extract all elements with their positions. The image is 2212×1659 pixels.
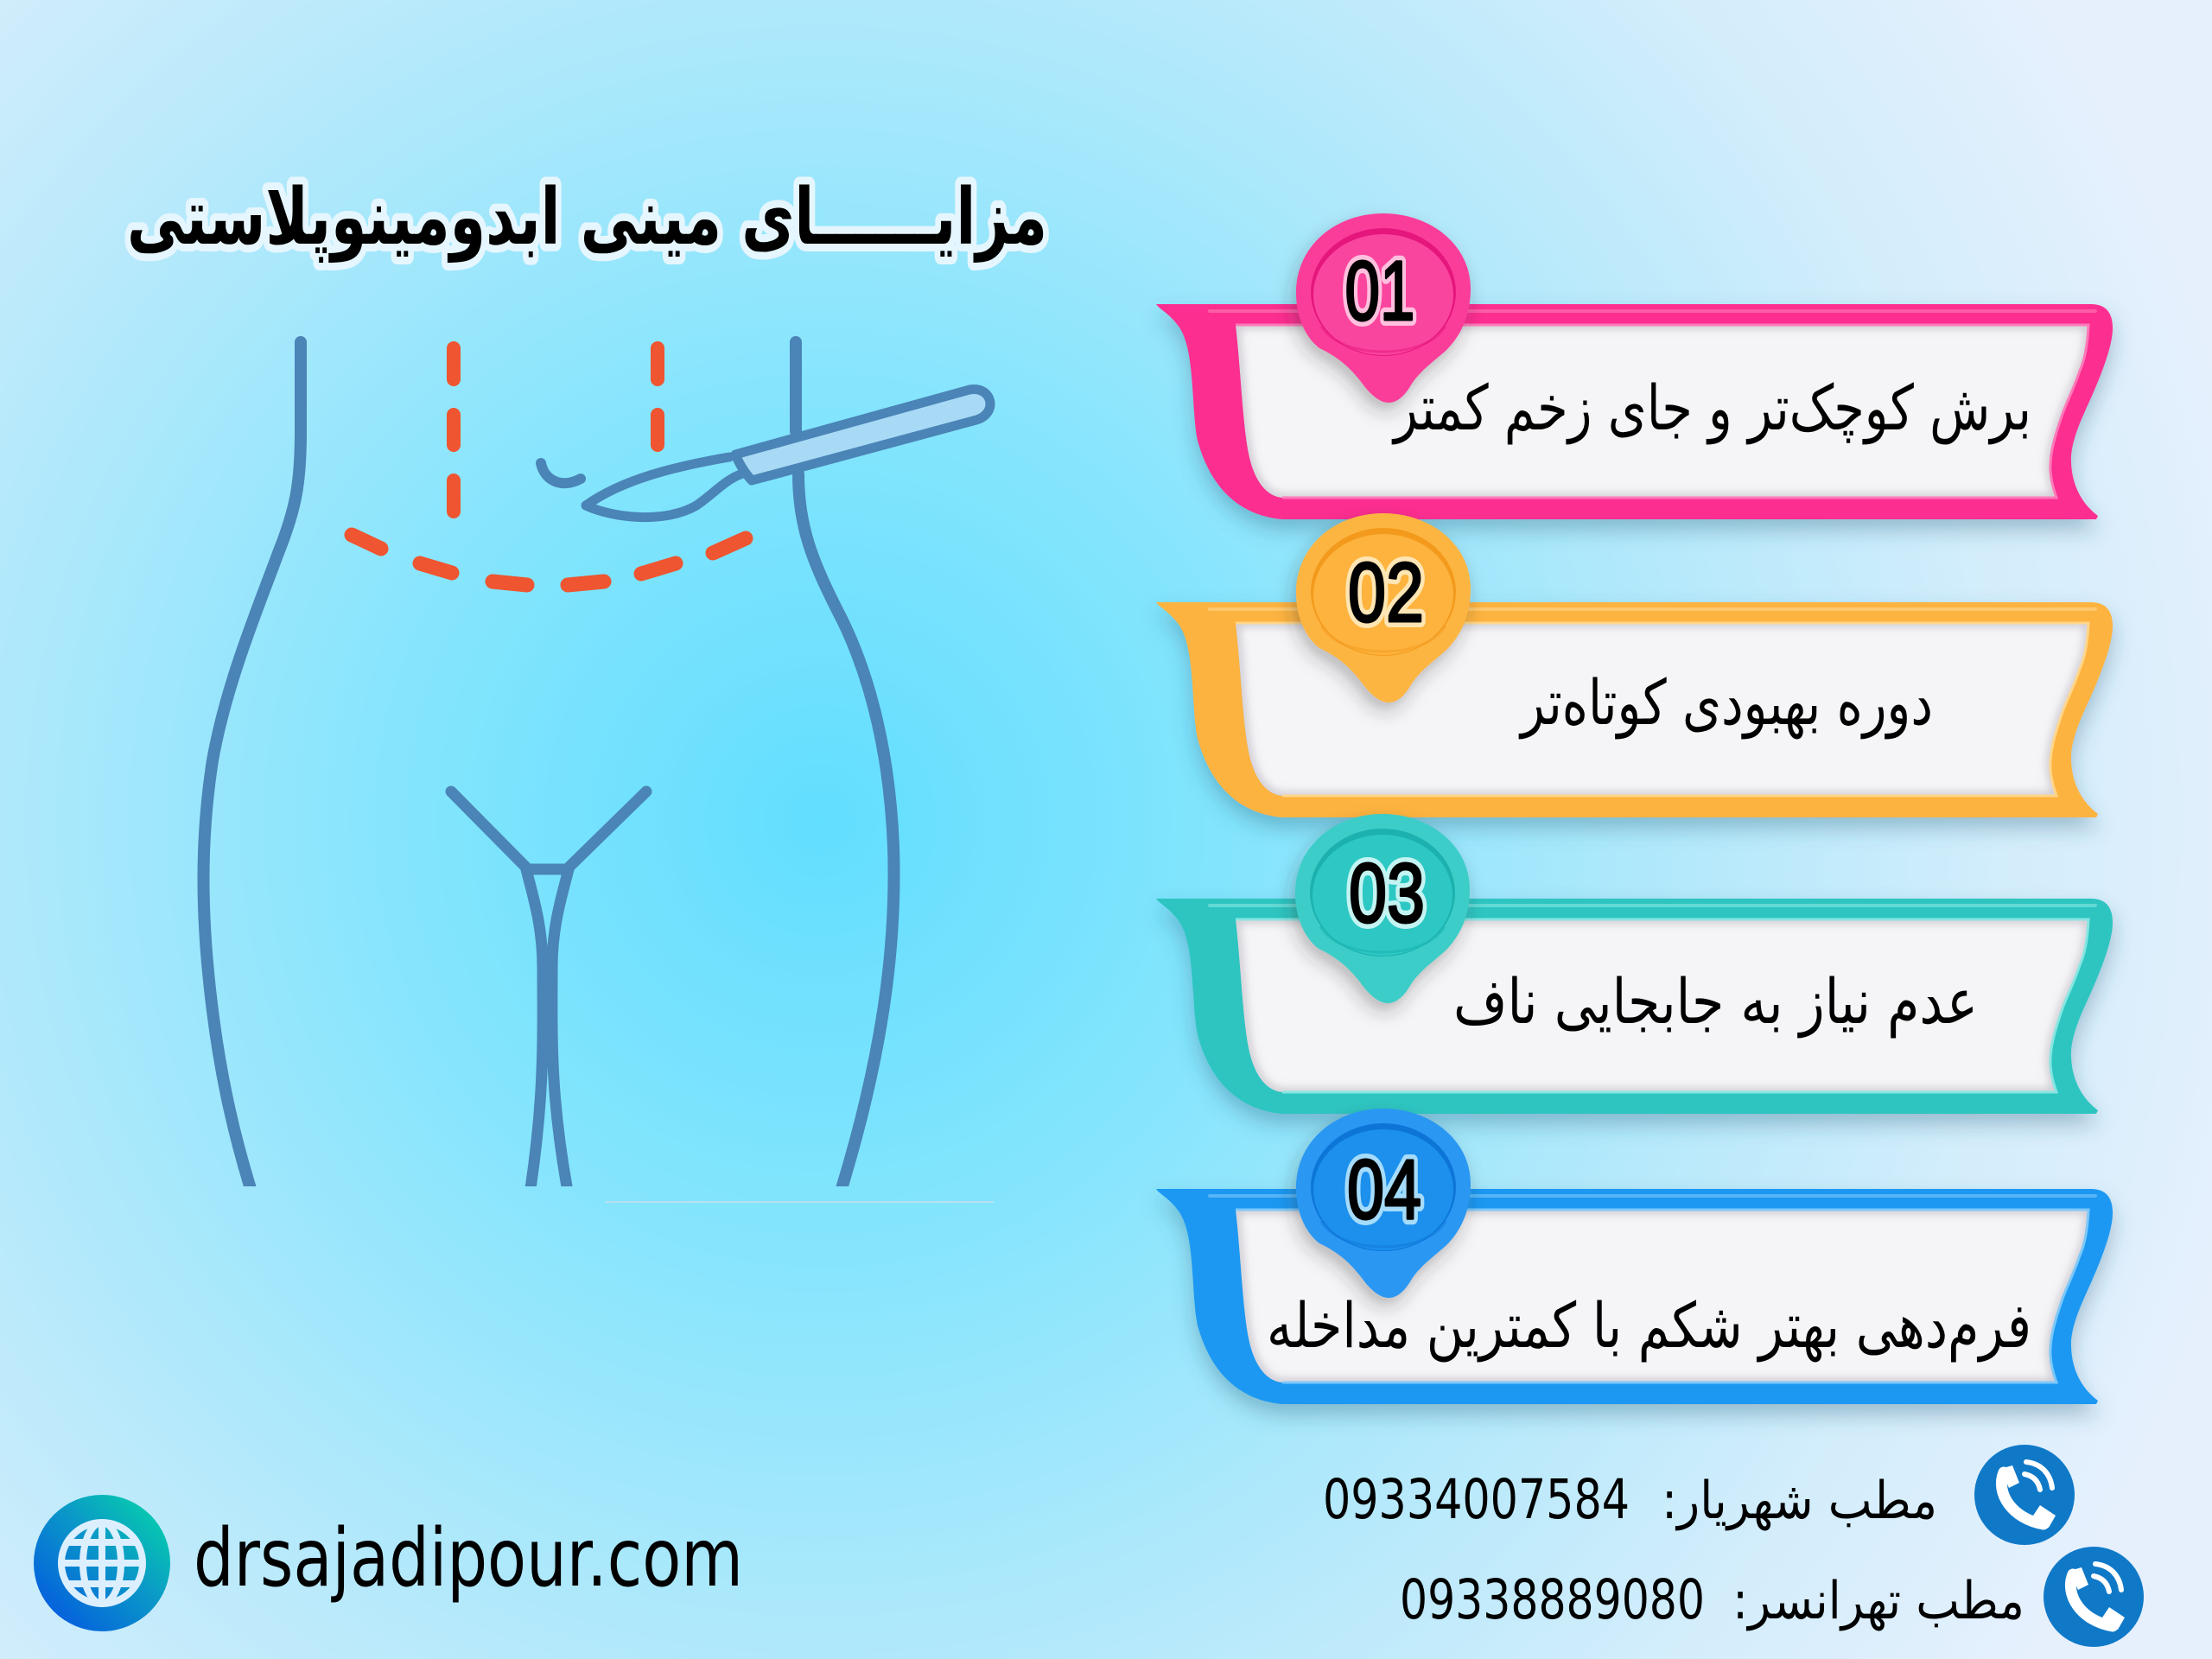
clinic contact 2: مطب تهرانسر:	[1732, 1571, 2024, 1631]
number 01: 01	[1344, 244, 1415, 338]
card 4	[1156, 1109, 2113, 1404]
curved incision dashes	[352, 535, 746, 585]
benefit text 2: دوره بهبودی کوتاه‌تر	[1519, 666, 1933, 740]
right body contour upper	[790, 342, 802, 431]
card 4 frame	[1156, 1189, 2113, 1404]
illustration: abdomen with incision lines and scalpel	[204, 342, 990, 1205]
phone icon 1	[1974, 1445, 2075, 1545]
card 3 frame	[1156, 899, 2113, 1114]
card 2 frame	[1156, 602, 2113, 817]
pin 02	[1296, 513, 1471, 702]
benefit text 1: برش کوچک‌تر و جای زخم کمتر	[1392, 372, 2031, 445]
pin 01	[1296, 213, 1471, 403]
card 2	[1156, 513, 2113, 817]
card 1	[1156, 213, 2113, 519]
clinic contact 1: مطب شهریار:	[1662, 1471, 1937, 1531]
pin 04	[1296, 1109, 1471, 1298]
navel	[541, 463, 581, 483]
clinic contact 1	[1323, 1468, 1937, 1531]
card 1 frame	[1156, 304, 2113, 519]
faint baseline	[605, 1201, 994, 1203]
left body contour	[204, 342, 301, 1205]
number 02: 02	[1348, 545, 1424, 639]
right body contour lower	[798, 474, 894, 1205]
phone icon 2	[2044, 1547, 2144, 1647]
number 03: 03	[1349, 846, 1425, 940]
benefit text 3: عدم نیاز به جابجایی ناف	[1453, 965, 1978, 1039]
number 04: 04	[1347, 1142, 1421, 1236]
number 01: 01	[1344, 244, 1415, 338]
clinic contact 2	[1400, 1568, 2024, 1631]
benefit text 4: فرم‌دهی بهتر شکم با کمترین مداخله	[1267, 1289, 2031, 1363]
clinic contact 1: 09334007584	[1323, 1468, 1630, 1531]
scalpel handle	[735, 389, 990, 480]
number 03: 03	[1349, 846, 1425, 940]
website address: drsajadipour.com	[194, 1511, 743, 1605]
card 3	[1156, 814, 2113, 1114]
globe icon	[34, 1495, 170, 1631]
groin shape	[451, 791, 646, 1205]
vertical incision dashes	[454, 348, 658, 512]
pin 03	[1295, 814, 1470, 1003]
title: مزایــــــای مینی ابدومینوپلاستی	[127, 172, 1047, 264]
number 04: 04	[1347, 1142, 1421, 1236]
clinic contact 2: 09338889080	[1400, 1568, 1705, 1631]
title: مزایــــــای مینی ابدومینوپلاستی	[127, 172, 1047, 264]
body contours and groin	[204, 342, 894, 1205]
number 02: 02	[1348, 545, 1424, 639]
scalpel blade	[586, 457, 741, 518]
